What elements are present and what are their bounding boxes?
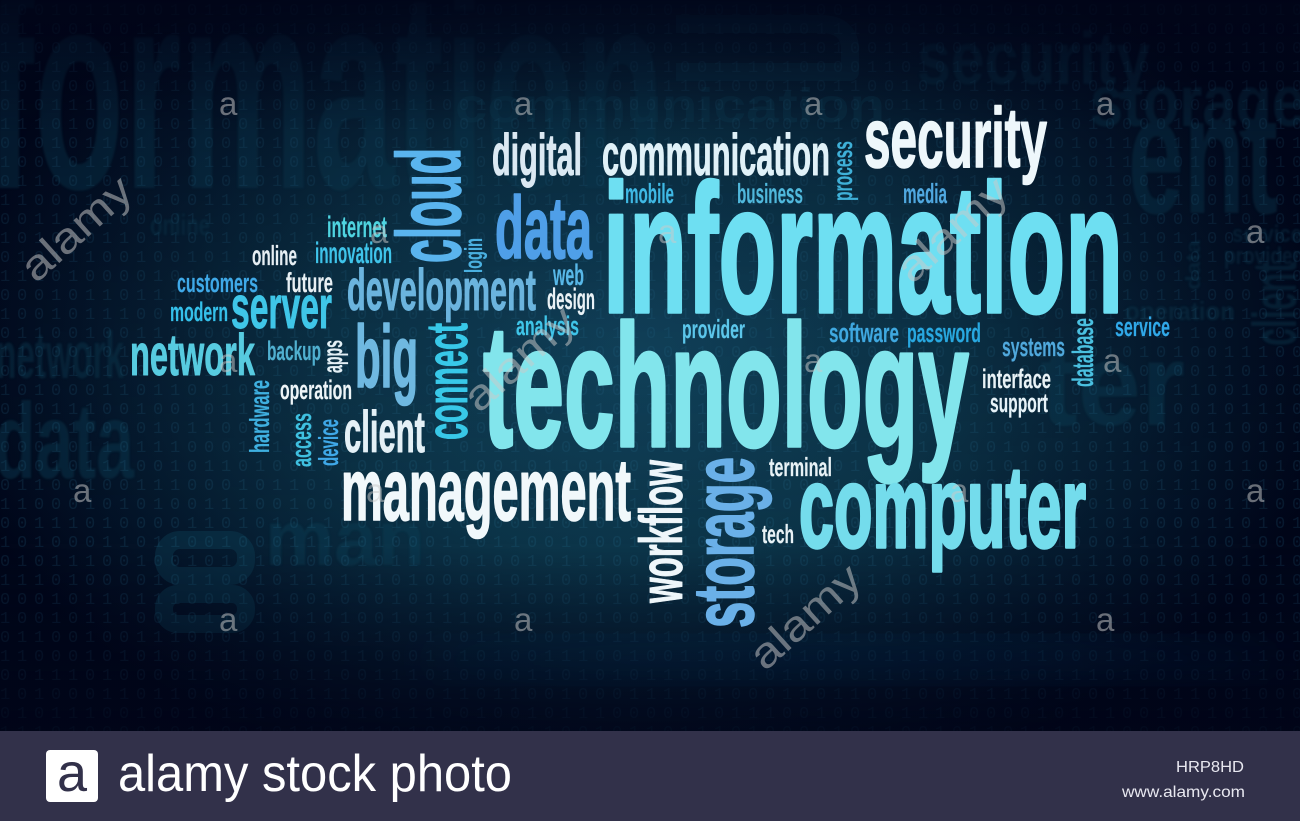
watermarks: a	[1246, 213, 1265, 250]
word: service: service	[1115, 312, 1170, 342]
ghost background words: man	[265, 494, 425, 582]
watermarks: a	[950, 472, 969, 509]
watermarks: a	[514, 85, 533, 122]
word: development: development	[347, 258, 536, 323]
word: internet: internet	[327, 211, 387, 244]
word: management: management	[341, 440, 631, 539]
word: login (vertical): login	[460, 238, 488, 273]
word cloud: cloud	[380, 148, 480, 263]
image id: HRP8HD	[1176, 759, 1244, 776]
ghost background words	[0, 0, 1300, 582]
word: terminal: terminal	[769, 452, 832, 482]
word: tech: tech	[762, 519, 794, 549]
icon: alamy logo: a	[57, 743, 88, 803]
word: password: password	[907, 318, 981, 348]
watermarks: a	[219, 601, 238, 638]
watermarks: alamy	[11, 166, 142, 291]
word: analysis: analysis	[516, 311, 579, 341]
watermarks: a	[804, 342, 823, 379]
word: communication: communication	[602, 123, 830, 188]
word: systems: systems	[1002, 332, 1065, 362]
word: server: server	[231, 274, 332, 341]
ghost background words: operation	[1125, 296, 1235, 326]
word: operation: operation	[280, 375, 352, 405]
ghost rotated glyph shapes	[164, 24, 850, 624]
watermarks: alamy	[454, 296, 585, 421]
word: web: web	[552, 259, 584, 292]
word: business: business	[737, 178, 803, 209]
word: digital: digital	[492, 123, 582, 188]
ghost background words: data	[1183, 239, 1205, 290]
word: software: software	[829, 318, 899, 348]
communication ghost band: communication	[455, 80, 885, 133]
watermarks: alamy	[740, 554, 871, 679]
watermarks: a	[366, 472, 385, 509]
word: online: online	[252, 240, 297, 271]
watermarks: a	[1096, 601, 1115, 638]
ghost background words: network	[0, 318, 124, 392]
word: hardware (vertical): hardware	[244, 380, 275, 453]
word: network: network	[130, 323, 255, 388]
watermarks: a	[658, 213, 677, 250]
word cloud: big	[355, 307, 418, 406]
watermarks: a	[370, 213, 389, 250]
word: provider: provider	[682, 314, 745, 344]
watermarks: a	[1103, 342, 1122, 379]
word: backup: backup	[267, 336, 321, 366]
word: workflow (vertical): workflow	[628, 460, 695, 604]
ghost background words: data	[0, 380, 135, 501]
word: storage (vertical): storage	[676, 457, 772, 628]
ghost background words: online	[150, 209, 210, 242]
word: process (vertical): process	[827, 141, 858, 201]
word: apps (vertical): apps	[317, 340, 348, 373]
word: support: support	[990, 388, 1048, 418]
word: database (vertical): database	[1067, 318, 1100, 387]
watermarks: a	[219, 342, 238, 379]
word: media: media	[903, 178, 947, 209]
word: modern: modern	[170, 297, 228, 327]
word: client: client	[344, 400, 425, 465]
website: www.alamy.com	[1121, 784, 1245, 801]
ghost background words: ter	[1040, 319, 1185, 451]
watermarks	[11, 85, 1265, 679]
word: data: data	[495, 178, 593, 277]
word: future: future	[286, 267, 333, 298]
word: connect (vertical): connect	[415, 323, 480, 440]
word cloud: design	[547, 283, 595, 316]
brand name: alamy stock photo	[118, 745, 512, 803]
watermarks: a	[804, 85, 823, 122]
word: interface: interface	[982, 364, 1051, 394]
lower blue glow	[420, 638, 1280, 682]
ghost background words: security	[917, 17, 1150, 100]
watermarks: a	[1246, 472, 1265, 509]
watermarks: a	[1096, 85, 1115, 122]
word: security: security	[864, 91, 1047, 185]
word: innovation: innovation	[315, 237, 392, 270]
watermarks: a	[73, 472, 92, 509]
footer bar	[0, 731, 1300, 821]
word: device (vertical): device	[313, 419, 344, 466]
word: mobile: mobile	[625, 178, 674, 209]
watermarks: a	[219, 85, 238, 122]
word cloud	[130, 91, 1170, 628]
watermarks: alamy	[887, 167, 1018, 292]
watermarks: a	[514, 601, 533, 638]
word: access (vertical): access	[286, 413, 318, 467]
icon: alamy logo	[46, 743, 98, 803]
word: customers: customers	[177, 268, 258, 298]
